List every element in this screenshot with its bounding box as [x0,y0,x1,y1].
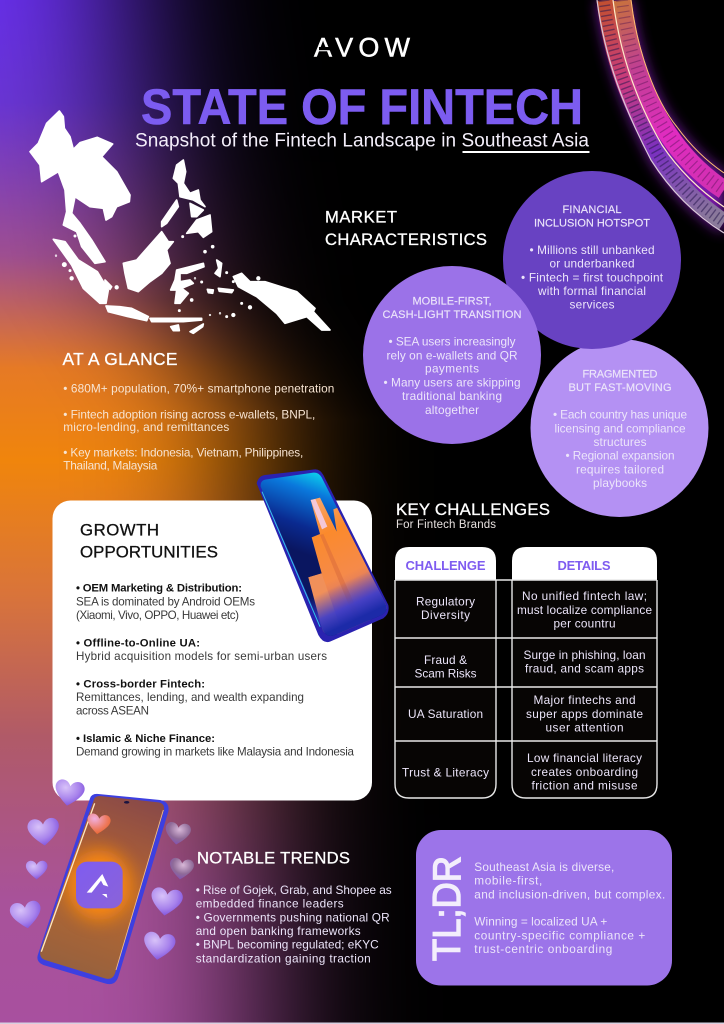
text: at a glance list: micro-lending, and remittances [63,420,229,434]
panel: TL;DR [416,830,672,986]
phone: app icon with hearts [9,778,195,984]
table row: UA saturation: UA Saturation [408,707,483,721]
table row: trust and literacy [402,751,642,793]
title: STATE OF FINTECH [141,79,583,135]
table row: UA saturation: Major fintechs and [534,693,636,707]
text: trends list: standardization gaining traction [196,951,371,965]
text: growth list: • OEM Marketing & Distribution: [76,583,242,595]
circle: financial inclusion hotspot: with formal financial [537,284,646,298]
table row: fraud and scam risks: Fraud & [424,653,467,667]
table row: regulatory diversity: per countru [554,617,616,631]
text: growth list: • Cross-border Fintech: [76,678,205,690]
table row: regulatory diversity: Regulatory [416,594,475,608]
circle: financial inclusion hotspot: INCLUSION HOTSPOT [534,218,650,230]
heading: market characteristics: CHARACTERISTICS [325,230,487,249]
text: at a glance list: • 680M+ population, 70%+ smartphone penetration [63,382,334,396]
text: growth list: • Offline-to-Online UA: [76,637,200,649]
table row: regulatory diversity: must localize compliance [517,603,652,617]
map: Southeast Asia [30,111,330,333]
text: growth list: Remittances, lending, and wealth expanding [76,691,304,704]
circle: fragmented but fast-moving: licensing and compliance [554,421,686,435]
circle: fragmented but fast-moving: FRAGMENTED [582,368,658,380]
table row: fraud and scam risks: fraud, and scam apps [525,662,644,676]
table row: fraud and scam risks: Scam Risks [414,667,477,681]
panel: growth opportunities [52,500,372,800]
table row: trust and literacy: friction and misuse [532,779,638,793]
heading: notable trends: NOTABLE TRENDS [197,848,350,867]
decorative neon ring [597,0,724,233]
text: trends list: • BNPL becoming regulated; eKYC [196,938,379,952]
panel: notable trends [196,848,392,965]
heart behind phone [53,778,86,808]
circle: financial inclusion hotspot: • Fintech = first touchpoint [521,270,664,284]
table row: trust and literacy: Low financial literacy [527,751,642,765]
circle: mobile-first, cash-light transition [363,266,541,444]
subtitle: Snapshot of the Fintech Landscape in Southeast Asia [135,131,589,152]
circle: financial inclusion hotspot: FINANCIAL [562,204,622,216]
text: TL;DR summary [474,860,665,956]
table row: regulatory diversity: No unified fintech law; [522,589,647,603]
table row: UA saturation: user attention [546,720,624,734]
text: TL;DR summary: and inclusion-driven, but complex. [474,887,665,901]
circle: fragmented but fast-moving: playbooks [593,476,647,490]
text: at a glance list: • Fintech adoption rising across e-wallets, BNPL, [63,408,315,422]
heading: growth opportunities [80,520,218,561]
text: growth list: across ASEAN [76,705,149,718]
table row: fraud and scam risks [414,648,646,681]
table row: trust and literacy: creates onboarding [531,765,638,779]
text: TL;DR summary: trust-centric onboarding [474,942,612,956]
text: growth list: Hybrid acquisition models for semi-urban users [76,650,327,663]
circle: fragmented but fast-moving: • Each country has unique [553,408,687,422]
circle: fragmented but fast-moving: requires tailored [576,462,664,476]
circle: fragmented but fast-moving: • Regional expansion [566,449,674,463]
table column: details: DETAILS [558,558,611,573]
heading: growth opportunities: OPPORTUNITIES [80,542,218,561]
text: trends list: • Governments pushing national QR [196,910,390,924]
app icon [76,862,123,908]
heading: market characteristics [325,208,487,249]
circle: fragmented but fast-moving: structures [594,435,647,449]
text: trends list: • Rise of Gojek, Grab, and Shopee as [196,883,392,897]
text: TL;DR summary: Southeast Asia is diverse, [474,860,614,874]
table column: challenge: CHALLENGE [406,558,486,573]
text: trends list [196,883,392,965]
circle: financial inclusion hotspot: • Millions still unbanked [530,243,654,257]
text: trends list: and open banking frameworks [196,924,361,938]
heading: TL;DR: TL;DR [426,856,469,961]
heading: key challenges: KEY CHALLENGES [396,500,550,519]
circle: financial inclusion hotspot: services [570,298,615,312]
text: trends list: embedded finance leaders [196,897,344,911]
table row: regulatory diversity: Diversity [421,608,470,622]
table row: trust and literacy: Trust & Literacy [402,766,489,780]
text: TL;DR summary: Winning = localized UA + [474,915,607,929]
circle: mobile-first, cash-light transition: payments [425,362,479,376]
circle: financial inclusion hotspot [503,171,681,349]
hearts [9,813,195,962]
text: growth list: Demand growing in markets like Malaysia and Indonesia [76,746,355,759]
text: at a glance list: Thailand, Malaysia [63,458,158,472]
phone body [37,794,169,984]
text: TL;DR summary: country-specific compliance + [474,928,645,942]
circle: mobile-first, cash-light transition: MOBILE-FIRST, [412,295,492,307]
heading: at a glance: AT A GLANCE [62,349,178,369]
heading: market characteristics: MARKET [325,208,397,227]
text: growth list [76,583,355,759]
text: growth list: SEA is dominated by Android OEMs [76,595,255,608]
heading: key challenges [396,500,550,531]
heading: growth opportunities: GROWTH [80,520,159,539]
logo: AVOW: AVOW [314,32,411,62]
text: growth list: • Islamic & Niche Finance: [76,733,215,745]
table row: fraud and scam risks: Surge in phishing, loan [524,648,646,662]
table: challenges and details [395,547,657,798]
circle: mobile-first, cash-light transition: rely on e-wallets and QR [386,348,518,362]
circle: mobile-first, cash-light transition: traditional banking [402,389,502,403]
table row: UA saturation [408,693,643,734]
circle: mobile-first, cash-light transition: altogether [425,403,479,417]
circle: fragmented but fast-moving [530,339,708,517]
text: at a glance list [63,382,334,472]
circle: mobile-first, cash-light transition: CASH-LIGHT TRANSITION [382,309,522,321]
circle: mobile-first, cash-light transition: • SEA users increasingly [388,335,516,349]
panel: at a glance [62,349,334,472]
circle: financial inclusion hotspot: or underbanked [550,257,634,271]
heading: key challenges: For Fintech Brands [396,519,496,531]
table column: details [512,547,657,798]
text: growth list: (Xiaomi, Vivo, OPPO, Huawei etc) [76,609,239,622]
circle: fragmented but fast-moving: BUT FAST-MOVING [568,382,672,394]
table column: challenge [395,547,496,798]
table row: UA saturation: super apps dominate [526,707,643,721]
phone: bar chart screen [257,469,400,647]
table row: regulatory diversity [416,589,652,631]
circle: mobile-first, cash-light transition: • Many users are skipping [384,376,520,390]
text: TL;DR summary: mobile-first, [474,874,542,888]
text: at a glance list: • Key markets: Indonesia, Vietnam, Philippines, [63,446,303,460]
